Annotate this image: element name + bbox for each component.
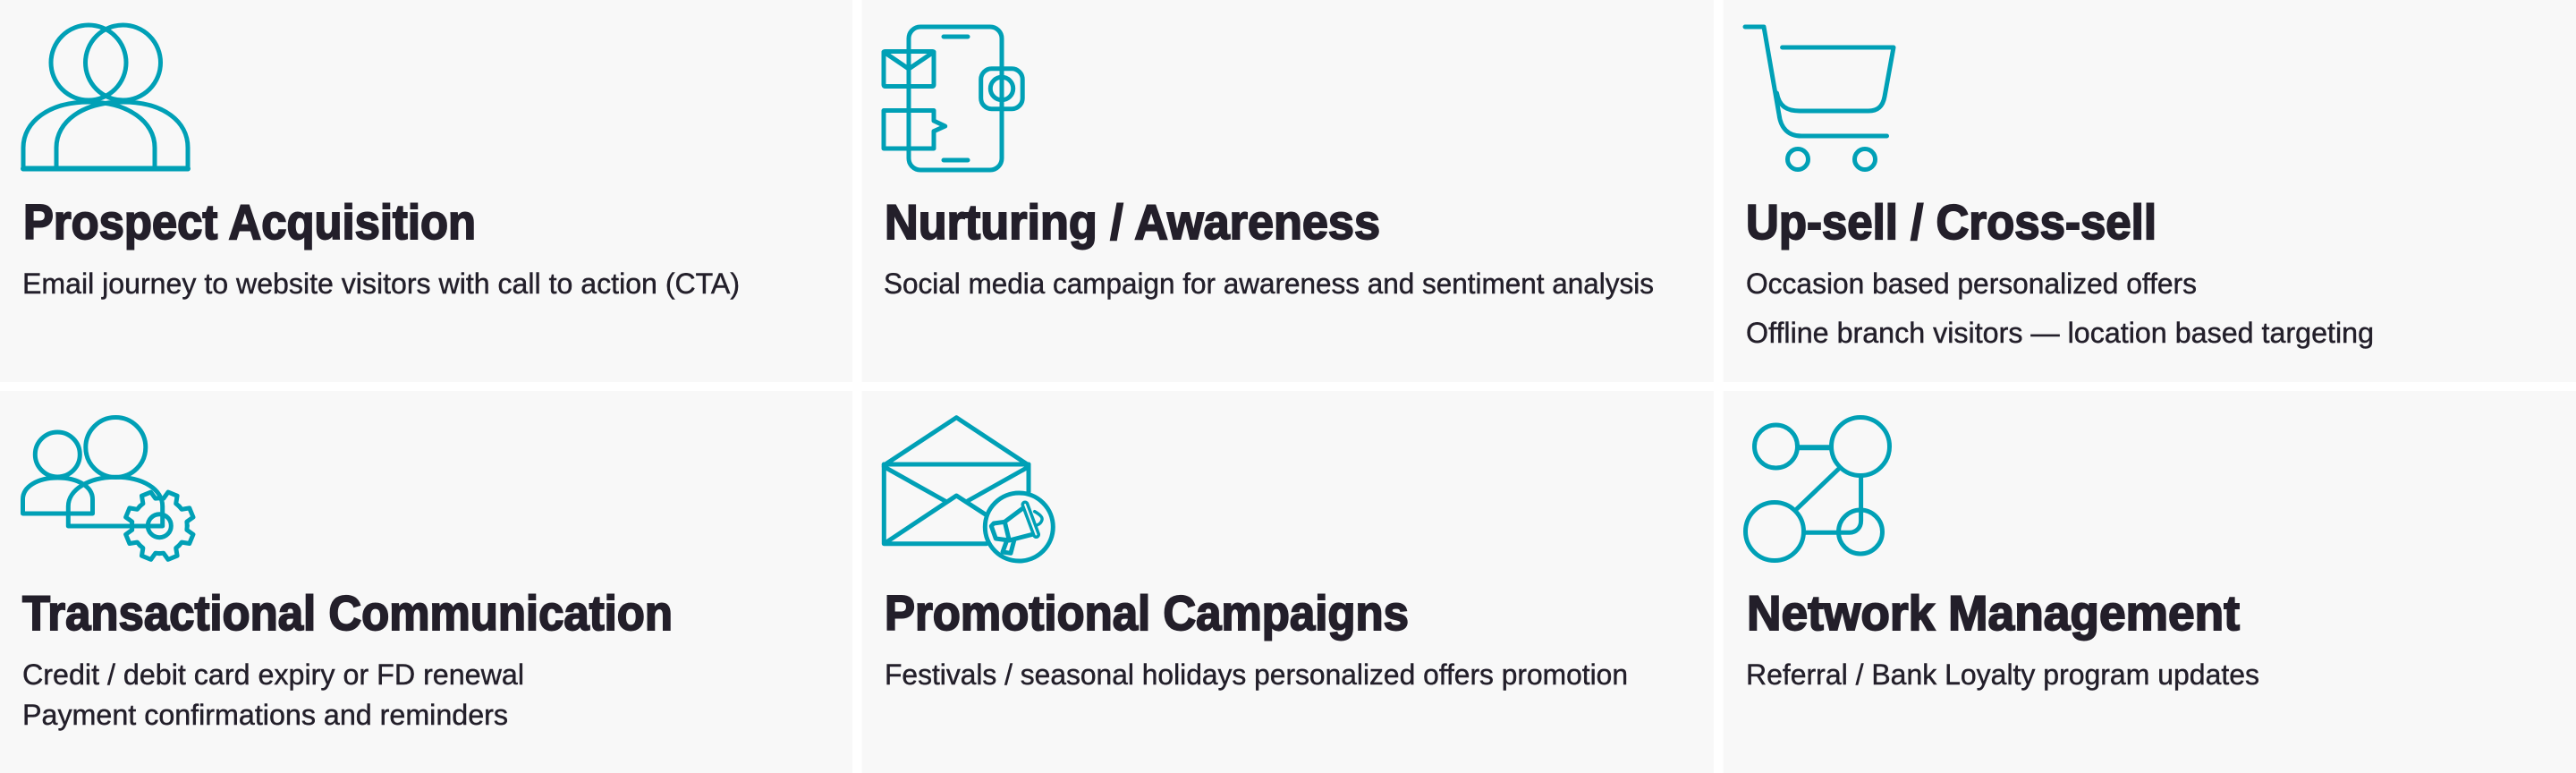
text: transactional second line: Payment confirmations and reminders xyxy=(22,699,508,731)
icon: phone with social media tiles xyxy=(884,27,1022,170)
heading: promotional campaigns: Promotional Campaigns xyxy=(885,585,1409,641)
icon: people with gear xyxy=(23,417,195,562)
panel: up-sell and cross-sell xyxy=(1724,0,2576,382)
text: prospect acquisition description: Email journey to website visitors with call to action (CTA) xyxy=(22,268,740,300)
panel: prospect acquisition xyxy=(0,0,852,382)
text: transactional first line: Credit / debit card expiry or FD renewal xyxy=(22,658,524,691)
icon: shopping cart xyxy=(1745,27,1894,170)
text: nurturing description: Social media campaign for awareness and sentiment analysis xyxy=(884,268,1654,300)
heading: nurturing / awareness: Nurturing / Awareness xyxy=(885,194,1380,250)
panel: network management xyxy=(1724,391,2576,773)
text: promotional description: Festivals / seasonal holidays personalized offers promotion xyxy=(885,658,1628,691)
icon: network nodes xyxy=(1746,417,1889,560)
panel: promotional campaigns xyxy=(862,391,1714,773)
icon: two overlapping people xyxy=(23,25,188,169)
text: up-sell second line: Offline branch visitors — location based targeting xyxy=(1746,317,2374,349)
heading: up-sell / cross-sell: Up-sell / Cross-sell xyxy=(1746,194,2157,250)
panel: nurturing and awareness xyxy=(862,0,1714,382)
heading: network management: Network Management xyxy=(1747,585,2240,641)
text: up-sell first line: Occasion based personalized offers xyxy=(1746,268,2197,300)
icon: envelope with megaphone xyxy=(884,418,1053,561)
heading: transactional communication: Transactional Communication xyxy=(22,585,673,641)
text: network description: Referral / Bank Loyalty program updates xyxy=(1746,658,2259,691)
heading: prospect acquisition: Prospect Acquisition xyxy=(23,194,476,250)
panel: transactional communication xyxy=(0,391,852,773)
